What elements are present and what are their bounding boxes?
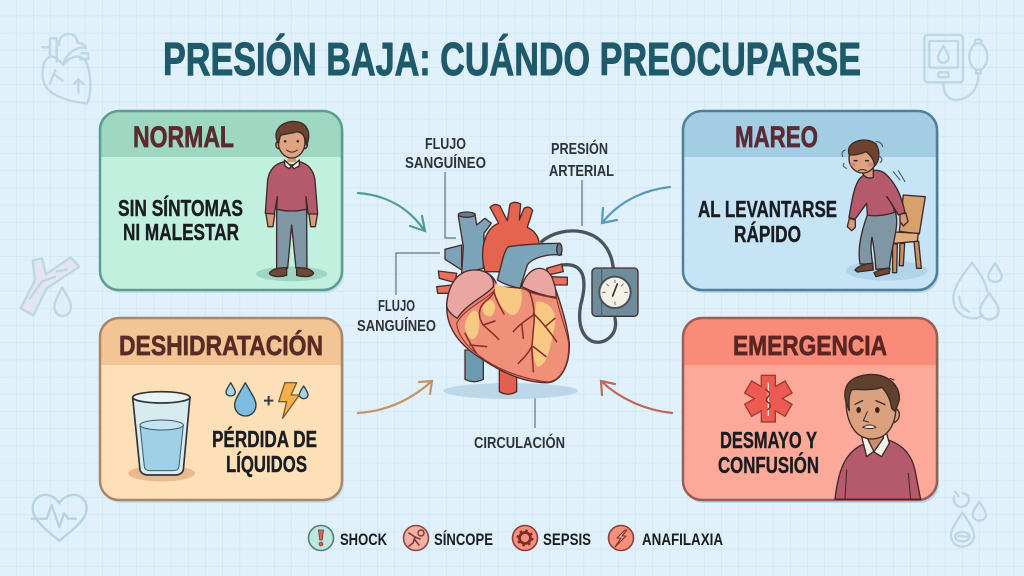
text: al levantarse rápido [698, 196, 837, 247]
text: sin síntomas: SIN SÍNTOMAS [118, 194, 243, 221]
legend [308, 526, 723, 550]
atria [447, 268, 556, 318]
superior vena cava [445, 212, 491, 273]
illustration: glass of water [128, 392, 195, 481]
icon: background small drops [951, 492, 986, 547]
legend item: anafilaxia [608, 526, 723, 550]
heading: normal: NORMAL [133, 121, 234, 154]
text: desmayo y confusión [718, 427, 819, 478]
leader lines [396, 172, 582, 428]
label: flujo sanguíneo lower: FLUJO [378, 298, 415, 315]
icon: star of life [746, 376, 791, 421]
illustration: dizzy man and chair [842, 140, 927, 281]
legend item: shock [308, 526, 388, 550]
aorta [483, 202, 539, 272]
fat patches [465, 283, 555, 367]
arrow: emergencia to heart [601, 381, 672, 413]
legend item: sepsis: SEPSIS [543, 530, 591, 549]
label: flujo sanguíneo lower: SANGUÍNEO [357, 318, 436, 335]
label: flujo sanguíneo top: SANGUÍNEO [405, 155, 486, 172]
heart illustration with pressure gauge [437, 202, 638, 399]
icon: background heart with pulse [32, 495, 87, 541]
legend item: sepsis [512, 526, 591, 550]
heading: emergencia: EMERGENCIA [733, 330, 887, 361]
icon: background water drops [953, 263, 1002, 319]
arrow: mareo to heart [602, 187, 670, 223]
icon: background heart [42, 34, 90, 103]
text: pérdida de líquidos: PÉRDIDA DE [212, 425, 317, 452]
icon: background blood vessel [21, 257, 79, 316]
text: pérdida de líquidos [212, 425, 317, 477]
illustration: worried man [835, 374, 921, 499]
text: sin síntomas [118, 194, 243, 245]
label: circulación: CIRCULACIÓN [474, 434, 565, 452]
label: presión arterial: PRESIÓN [551, 140, 608, 158]
arrow: normal to heart [358, 193, 425, 231]
label: flujo sanguíneo top [405, 136, 486, 172]
label: presión arterial [549, 140, 614, 180]
label: presión arterial: ARTERIAL [549, 163, 614, 180]
label: flujo sanguíneo top: FLUJO [425, 136, 466, 153]
heading: deshidratación: DESHIDRATACIÓN [119, 330, 323, 361]
label: flujo sanguíneo lower [357, 298, 436, 335]
legend item: síncope: SÍNCOPE [434, 530, 493, 549]
coronary arteries [465, 292, 557, 372]
pulmonary artery [497, 243, 562, 288]
panel: deshidratación [100, 318, 344, 503]
panel: emergencia [683, 318, 939, 503]
tube to gauge [542, 231, 616, 342]
text: desmayo y confusión: CONFUSIÓN [718, 451, 819, 478]
legend item: síncope [404, 526, 493, 550]
side vessels [437, 264, 567, 293]
icon: background blood pressure monitor [924, 35, 987, 100]
arrow: deshidratación to heart [358, 381, 432, 413]
shadow under heart [443, 383, 578, 399]
heading: mareo: MAREO [735, 121, 818, 154]
panel: normal [100, 111, 344, 293]
icon: drops and lightning [226, 383, 308, 418]
text: desmayo y confusión: DESMAYO Y [720, 427, 817, 453]
text: al levantarse rápido: AL LEVANTARSE [698, 196, 837, 222]
legend item: shock: SHOCK [340, 530, 388, 549]
text: sin síntomas: NI MALESTAR [123, 219, 239, 245]
gauge [592, 268, 638, 316]
panel: mareo [683, 111, 939, 293]
heart body [447, 270, 569, 383]
text: al levantarse rápido: RÁPIDO [734, 220, 801, 247]
text: pérdida de líquidos: LÍQUIDOS [226, 450, 307, 477]
lower vessels [465, 350, 517, 394]
illustration: standing man [256, 121, 327, 281]
ventricle shading [457, 287, 569, 382]
legend item: anafilaxia: ANAFILAXIA [642, 530, 723, 549]
